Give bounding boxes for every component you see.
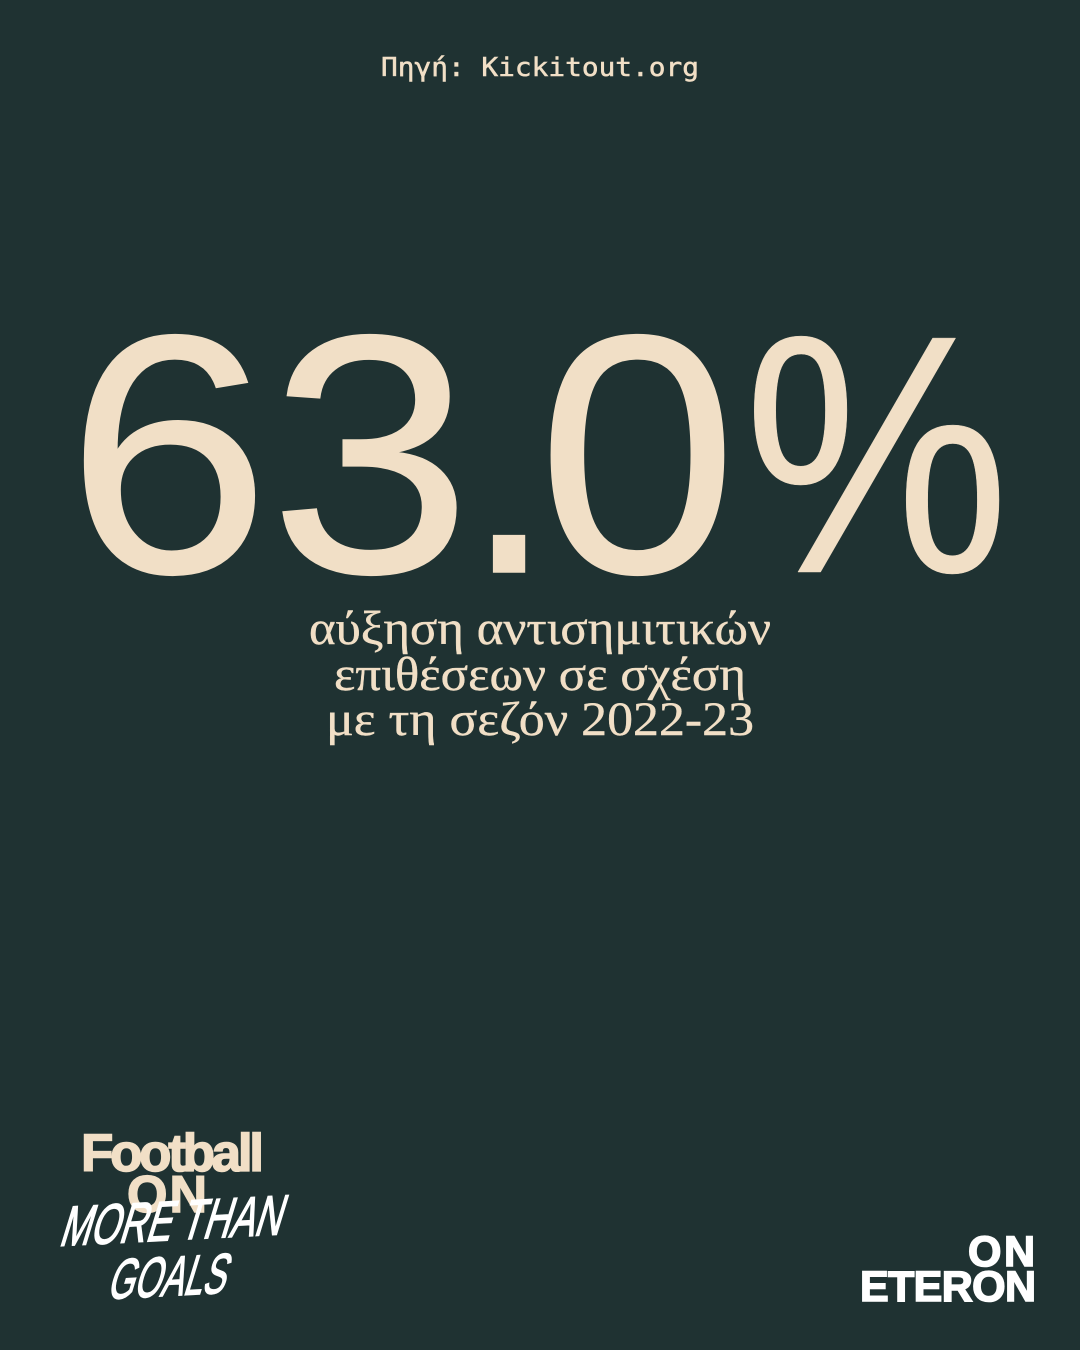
logo line: ETERON: ETERON <box>860 1263 1036 1311</box>
big number: 6 <box>66 266 270 645</box>
big number: . <box>464 265 554 645</box>
big number: 0 <box>537 265 738 645</box>
big number: % <box>744 264 1010 644</box>
subtitle: με τη σεζόν 2022-23 <box>326 693 754 746</box>
source line: Πηγή: Kickitout.org <box>381 53 699 83</box>
subtitle: επιθέσεων σε σχέση <box>334 648 746 701</box>
logo wordmark: Football: Football <box>81 1124 264 1183</box>
logo script: GOALS: GOALS <box>102 1243 239 1312</box>
logo: Football ON More Than Goals <box>54 1124 295 1312</box>
subtitle: αύξηση αντισημιτικών <box>309 602 771 655</box>
logo: ON ETERON <box>860 1228 1036 1311</box>
big number <box>66 264 1010 645</box>
big number: 3 <box>269 264 472 644</box>
logo line: ON: ON <box>968 1228 1035 1276</box>
logo script: MORE THAN: MORE THAN <box>54 1184 295 1259</box>
subtitle <box>309 602 771 746</box>
logo wordmark: ON: ON <box>127 1166 207 1224</box>
